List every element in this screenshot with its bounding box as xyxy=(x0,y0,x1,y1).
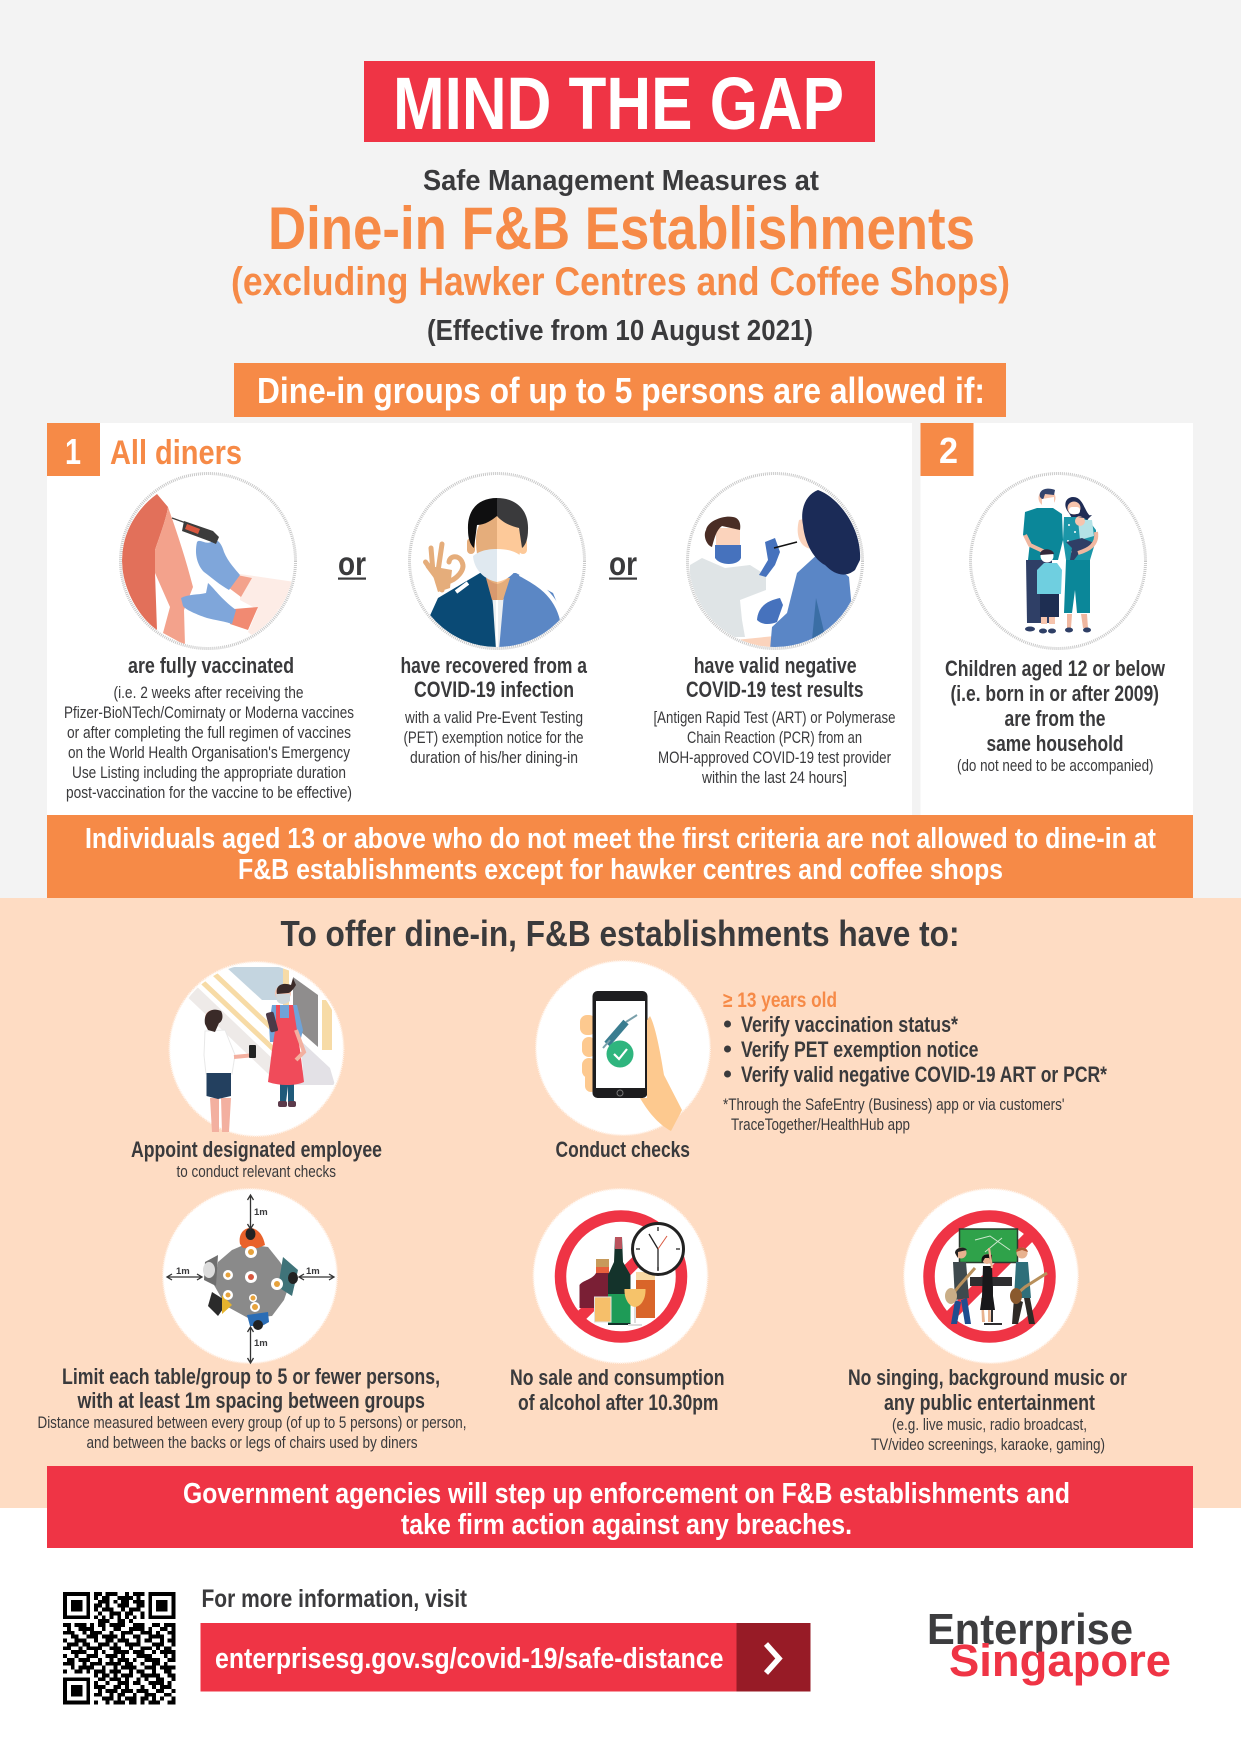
checklist: Verify vaccination status* xyxy=(741,1012,958,1037)
orange banner: group size: Dine-in groups of up to 5 persons are allowed if: xyxy=(257,370,985,411)
icon: family xyxy=(970,474,1146,648)
label: no music: TV/video screenings, karaoke, gaming) xyxy=(871,1436,1105,1454)
text: fully vaccinated: (i.e. 2 weeks after receiving the xyxy=(114,684,304,702)
label: conduct checks: Conduct checks xyxy=(556,1137,690,1162)
text: recovered xyxy=(400,653,588,767)
icon: table spacing: 1m xyxy=(254,1207,268,1218)
text: negative test xyxy=(654,653,896,787)
checklist: ≥ 13 years old xyxy=(723,989,837,1012)
label: no alcohol xyxy=(510,1365,724,1415)
text: recovered: (PET) exemption notice for the xyxy=(404,729,584,747)
number badge 1: 1 xyxy=(65,431,81,472)
text: negative test: [Antigen Rapid Test (ART) or Polymerase xyxy=(654,709,896,727)
text: fully vaccinated: Use Listing including the appropriate duration xyxy=(72,764,346,782)
label: no music: any public entertainment xyxy=(884,1390,1096,1415)
connector: or: or xyxy=(338,545,366,582)
footer prompt: For more information, visit xyxy=(202,1585,468,1613)
label: no music: No singing, background music or xyxy=(848,1365,1127,1390)
label: table limit xyxy=(38,1364,466,1452)
panel: all diners xyxy=(47,423,912,815)
checklist xyxy=(723,989,1107,1134)
orange notice band xyxy=(47,815,1193,898)
text: fully vaccinated: or after completing the full regimen of vaccines xyxy=(67,724,351,742)
effective date: (Effective from 10 August 2021) xyxy=(427,315,813,347)
text: negative test: have valid negative xyxy=(694,653,857,678)
icon: table spacing: 1m xyxy=(306,1266,320,1277)
text: fully vaccinated: are fully vaccinated xyxy=(128,653,294,678)
label: table limit: and between the backs or legs of chairs used by diners xyxy=(86,1434,418,1452)
title banner: MIND THE GAP xyxy=(393,62,844,145)
red enforcement band: Government agencies will step up enforcement on F&B establishments and xyxy=(183,1478,1070,1510)
subtitle: Safe Management Measures at xyxy=(423,165,819,197)
red enforcement band: take firm action against any breaches. xyxy=(401,1509,852,1541)
section heading: To offer dine-in, F&B establishments have to: xyxy=(280,913,960,954)
text: children criteria: same household xyxy=(986,731,1124,756)
logo: Enterprise Singapore: Enterprise xyxy=(927,1605,1133,1654)
text: children criteria: (do not need to be accompanied) xyxy=(957,757,1154,775)
icon: no alcohol xyxy=(534,1189,708,1363)
icon: appoint employee xyxy=(170,962,344,1136)
logo: Enterprise Singapore: Singapore xyxy=(949,1635,1171,1686)
label: appoint employee: to conduct relevant checks xyxy=(176,1163,336,1181)
icon: vaccination xyxy=(120,474,296,650)
number badge 2: 2 xyxy=(939,430,958,471)
text: children criteria: (i.e. born in or after 2009) xyxy=(950,681,1159,706)
link button: enterprisesg.gov.sg/covid-19/safe-distance xyxy=(215,1643,724,1675)
panel: peach background xyxy=(0,898,1241,1508)
red enforcement band xyxy=(47,1466,1193,1548)
checklist: TraceTogether/HealthHub app xyxy=(731,1116,910,1134)
panel heading: All diners xyxy=(110,434,242,472)
orange notice band: F&B establishments except for hawker centres and coffee shops xyxy=(238,854,1003,886)
orange banner: group size xyxy=(234,363,1006,417)
icon: covid test swab xyxy=(688,474,862,650)
QR code xyxy=(63,1592,176,1704)
label: table limit: with at least 1m spacing between groups xyxy=(77,1388,425,1413)
text: negative test: Chain Reaction (PCR) from an xyxy=(687,729,862,747)
label: no alcohol: No sale and consumption xyxy=(510,1365,724,1390)
text: children criteria xyxy=(945,656,1166,775)
text: recovered: have recovered from a xyxy=(400,653,588,678)
icon: table spacing: 1m xyxy=(176,1266,190,1277)
text: children criteria: Children aged 12 or below xyxy=(945,656,1166,681)
text: fully vaccinated: post-vaccination for the vaccine to be effective) xyxy=(66,784,352,802)
text: recovered: with a valid Pre-Event Testing xyxy=(404,709,583,727)
link button xyxy=(200,1623,810,1692)
text: fully vaccinated: on the World Health Organisation's Emergency xyxy=(68,744,351,762)
main heading: Dine-in F&B Establishments xyxy=(268,195,975,262)
label: no music xyxy=(848,1365,1127,1454)
text: recovered: duration of his/her dining-in xyxy=(410,749,578,767)
logo: Enterprise Singapore xyxy=(927,1605,1171,1686)
label: appoint employee: Appoint designated employee xyxy=(131,1137,382,1162)
text: negative test: MOH-approved COVID-19 test provider xyxy=(658,749,891,767)
text: fully vaccinated xyxy=(64,653,354,802)
number badge 1 xyxy=(47,423,100,476)
text: recovered: COVID-19 infection xyxy=(414,677,574,702)
panel: children xyxy=(920,423,1193,815)
checklist: Verify valid negative COVID-19 ART or PCR* xyxy=(741,1062,1107,1087)
icon: table spacing: 1m xyxy=(254,1338,268,1349)
label: no alcohol: of alcohol after 10.30pm xyxy=(518,1390,718,1415)
number badge 2 xyxy=(920,423,974,476)
label: appoint employee xyxy=(131,1137,382,1181)
icon: no music xyxy=(904,1189,1078,1363)
label: table limit: Distance measured between every group (of up to 5 persons) or person, xyxy=(38,1414,466,1432)
icon: phone check xyxy=(536,961,710,1135)
text: negative test: COVID-19 test results xyxy=(686,677,864,702)
checklist: *Through the SafeEntry (Business) app or via customers' xyxy=(723,1096,1064,1114)
label: table limit: Limit each table/group to 5 or fewer persons, xyxy=(62,1364,440,1389)
icon: table spacing xyxy=(163,1189,337,1363)
label: no music: (e.g. live music, radio broadcast, xyxy=(892,1416,1087,1434)
checklist: Verify PET exemption notice xyxy=(741,1037,978,1062)
heading qualifier: (excluding Hawker Centres and Coffee Shops) xyxy=(231,260,1010,304)
text: negative test: within the last 24 hours] xyxy=(701,769,847,787)
spacing arrows xyxy=(167,1195,334,1363)
icon: recovered person with mask xyxy=(410,474,584,650)
connector: or: or xyxy=(609,545,637,582)
icon: chevron arrow xyxy=(766,1644,779,1673)
text: children criteria: are from the xyxy=(1004,706,1106,731)
text: fully vaccinated: Pfizer-BioNTech/Comirnaty or Moderna vaccines xyxy=(64,704,354,722)
